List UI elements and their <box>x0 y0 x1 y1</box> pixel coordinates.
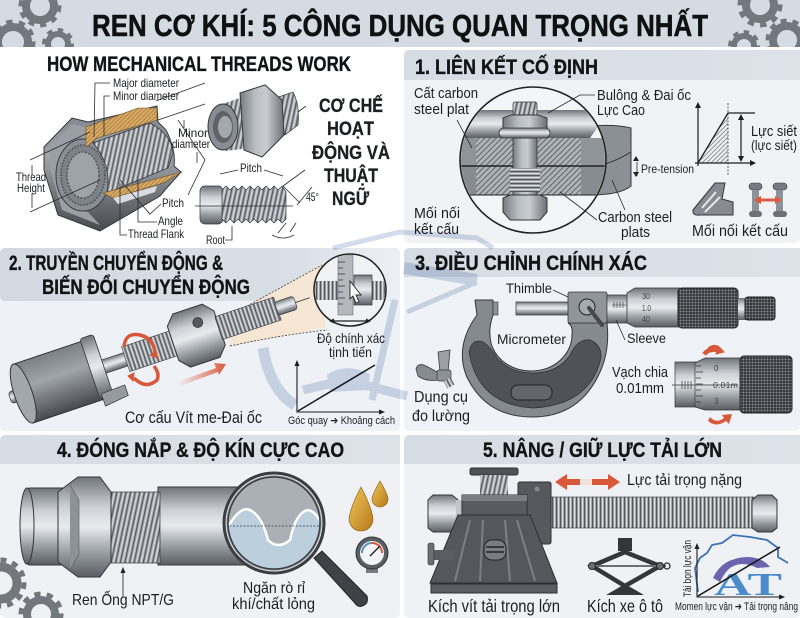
icon: gears top right <box>728 0 800 47</box>
stud with thread <box>195 161 319 247</box>
thread labels and leader lines: Major diameter <box>113 76 179 90</box>
chart: torque vs load <box>675 540 798 613</box>
thimble detail scale <box>672 345 792 424</box>
panel 2: motion transmission <box>0 248 400 434</box>
micrometer labels: Sleeve <box>627 330 666 346</box>
icon: structural joints: Mối nối kết cấu <box>692 223 788 240</box>
heading 3: 3. ĐIỀU CHỈNH CHÍNH XÁC <box>415 252 647 275</box>
panel 1: fixed connection <box>404 50 800 243</box>
thread labels and leader lines <box>16 76 210 241</box>
micrometer: 30 <box>642 292 650 301</box>
red translation arrow <box>177 363 226 386</box>
text: mechanism and terminology: NGỮ <box>332 188 369 210</box>
text: mechanism and terminology: THUẬT <box>324 165 378 187</box>
icon: pressure gauge <box>356 537 388 573</box>
thread labels and leader lines: Angle <box>158 214 183 228</box>
threaded pipe fitting: Ren Ống NPT/G <box>72 589 174 609</box>
icon: structural joints <box>692 183 788 240</box>
heading 4: 4. ĐÓNG NẮP & ĐỘ KÍN CỰC CAO <box>57 438 344 462</box>
micrometer: 1.0 <box>642 304 651 313</box>
micrometer labels: Thimble <box>506 280 552 296</box>
chart: angle vs distance <box>288 360 395 427</box>
caption: lead screw: Cơ cấu Vít me-Đai ốc <box>125 408 262 427</box>
labels: Mối nối <box>414 205 460 222</box>
chart: torque vs load: Tải bọn lực vận <box>682 540 694 597</box>
labels: Carbon steel <box>598 209 672 226</box>
thimble detail scale: 0.01m <box>713 381 738 390</box>
magnified view <box>314 254 386 360</box>
red double arrow <box>555 472 742 490</box>
heading 1: 1. LIÊN KẾT CỐ ĐỊNH <box>415 55 598 79</box>
thimble detail scale: 3 <box>714 397 719 406</box>
screw jack with long threaded rod <box>428 468 777 593</box>
micrometer labels: Micrometer <box>497 331 566 347</box>
micrometer labels: Vạch chia <box>612 364 669 381</box>
chart: angle vs distance: Góc quay ➔ Khoảng cách <box>288 415 395 427</box>
thread labels and leader lines: Minor diameter <box>113 89 179 103</box>
cutaway threaded nut <box>44 106 182 231</box>
thread labels and leader lines: Height <box>17 181 46 195</box>
stud with thread: 45° <box>306 190 319 204</box>
red double arrow: Lực tải trọng nặng <box>627 472 742 489</box>
lead screw mechanism with motor <box>0 265 322 434</box>
magnified view: Độ chính xác <box>317 330 385 346</box>
labels: steel plat <box>414 101 470 118</box>
text: mechanism and terminology: ĐỘNG VÀ <box>312 142 390 164</box>
magnified view: tịnh tiến <box>329 344 372 360</box>
icon: oil drops <box>349 481 388 531</box>
labels: Bulông & Đai ốc <box>597 87 691 104</box>
labels <box>414 85 694 241</box>
icon: wing nut: Dụng cụ <box>414 389 468 406</box>
micrometer labels: 0.01mm <box>616 380 664 397</box>
text: mechanism and terminology: HOẠT <box>327 119 374 140</box>
text: mechanism and terminology <box>312 95 390 210</box>
magnifier with thread seal: khí/chất lỏng <box>232 596 315 613</box>
panel 5: heavy load lifting <box>404 435 800 618</box>
heading 2: BIẾN ĐỔI CHUYỂN ĐỘNG <box>42 275 250 299</box>
hex nipple fitting <box>208 85 306 157</box>
icon: gears top left <box>0 0 74 47</box>
micrometer labels <box>497 280 669 397</box>
threaded pipe fitting <box>20 477 248 609</box>
text: mechanism and terminology: CƠ CHẾ <box>319 95 383 117</box>
thimble detail scale: 0 <box>714 364 719 373</box>
heading 2: 2. TRUYỀN CHUYỂN ĐỘNG & <box>9 251 223 275</box>
micrometer <box>462 288 775 417</box>
labels: Pre-tension <box>641 162 694 176</box>
magnifier with thread seal <box>224 473 367 613</box>
labels: Cất carbon <box>414 85 478 102</box>
heading 5: 5. NÂNG / GIỮ LỰC TẢI LỚN <box>483 438 722 462</box>
scissor car jack <box>588 538 670 595</box>
thread labels and leader lines: Thread <box>16 170 46 184</box>
panel 4: sealing <box>0 435 400 618</box>
captions <box>428 596 663 616</box>
watermark logo <box>263 232 493 405</box>
stud with thread: Pitch <box>240 161 262 175</box>
thread labels and leader lines: Pitch <box>162 196 184 210</box>
icon: wing nut <box>412 350 470 425</box>
icon: wing nut: đo lường <box>412 408 470 425</box>
captions: Kích vít tải trọng lớn <box>428 596 560 616</box>
light cone <box>228 262 325 347</box>
red rotation arrows <box>124 334 158 385</box>
magnifier with thread seal: Ngăn rò rỉ <box>243 580 305 597</box>
thread labels and leader lines: Minor <box>178 126 208 140</box>
logo: AT gear <box>695 535 788 602</box>
heading: how threads work: HOW MECHANICAL THREADS WORK <box>47 53 351 76</box>
panel: how mechanical threads work <box>0 47 401 247</box>
thread labels and leader lines: Thread Flank <box>128 227 185 241</box>
labels: plats <box>621 224 650 241</box>
chart: tightening force <box>695 102 798 175</box>
labels: kết cấu <box>414 221 459 238</box>
logo: AT gear: AT <box>714 566 782 602</box>
stud with thread: Root <box>206 233 225 247</box>
micrometer: 40 <box>642 315 650 324</box>
panel 3: precise adjustment <box>404 248 800 431</box>
heading 2 <box>9 251 250 299</box>
labels: Lực Cao <box>597 102 645 119</box>
captions: Kích xe ô tô <box>587 596 663 616</box>
bolted plates cross-section <box>457 87 639 233</box>
thread labels and leader lines: diameter <box>172 137 210 151</box>
title band <box>0 0 800 47</box>
icon: gears bottom left <box>0 560 61 618</box>
